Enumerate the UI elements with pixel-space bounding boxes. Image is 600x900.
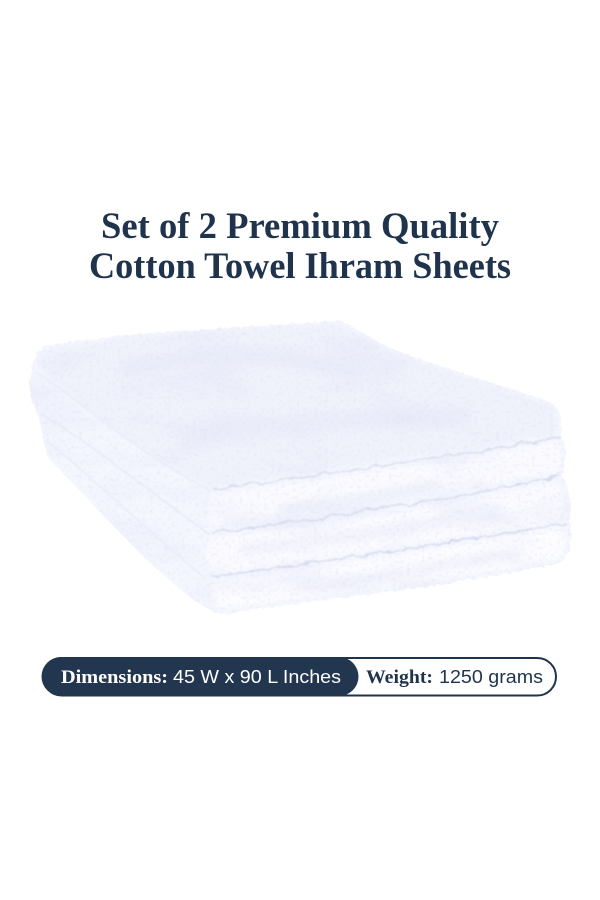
- fold lines: [36, 372, 566, 578]
- weight text: Weight:: [366, 667, 433, 688]
- terry texture: [29, 320, 572, 614]
- dimensions text: 45 W x 90 L Inches: [173, 667, 341, 687]
- title: [89, 206, 511, 287]
- dimensions text: [61, 667, 341, 688]
- towel silhouette: [29, 320, 572, 614]
- specifications pill: [42, 657, 556, 696]
- dimensions segment: [42, 657, 358, 696]
- soft shadows: [120, 356, 520, 590]
- weight segment outline: [43, 658, 556, 696]
- title: Cotton Towel Ihram Sheets: [89, 246, 511, 287]
- front fold highlights: [207, 442, 565, 608]
- dimensions text: Dimensions:: [61, 667, 168, 688]
- weight text: 1250 grams: [439, 667, 543, 687]
- top face tone: [38, 324, 557, 487]
- towel stack illustration: [29, 320, 572, 614]
- title: Set of 2 Premium Quality: [101, 206, 499, 247]
- weight text: [366, 667, 543, 688]
